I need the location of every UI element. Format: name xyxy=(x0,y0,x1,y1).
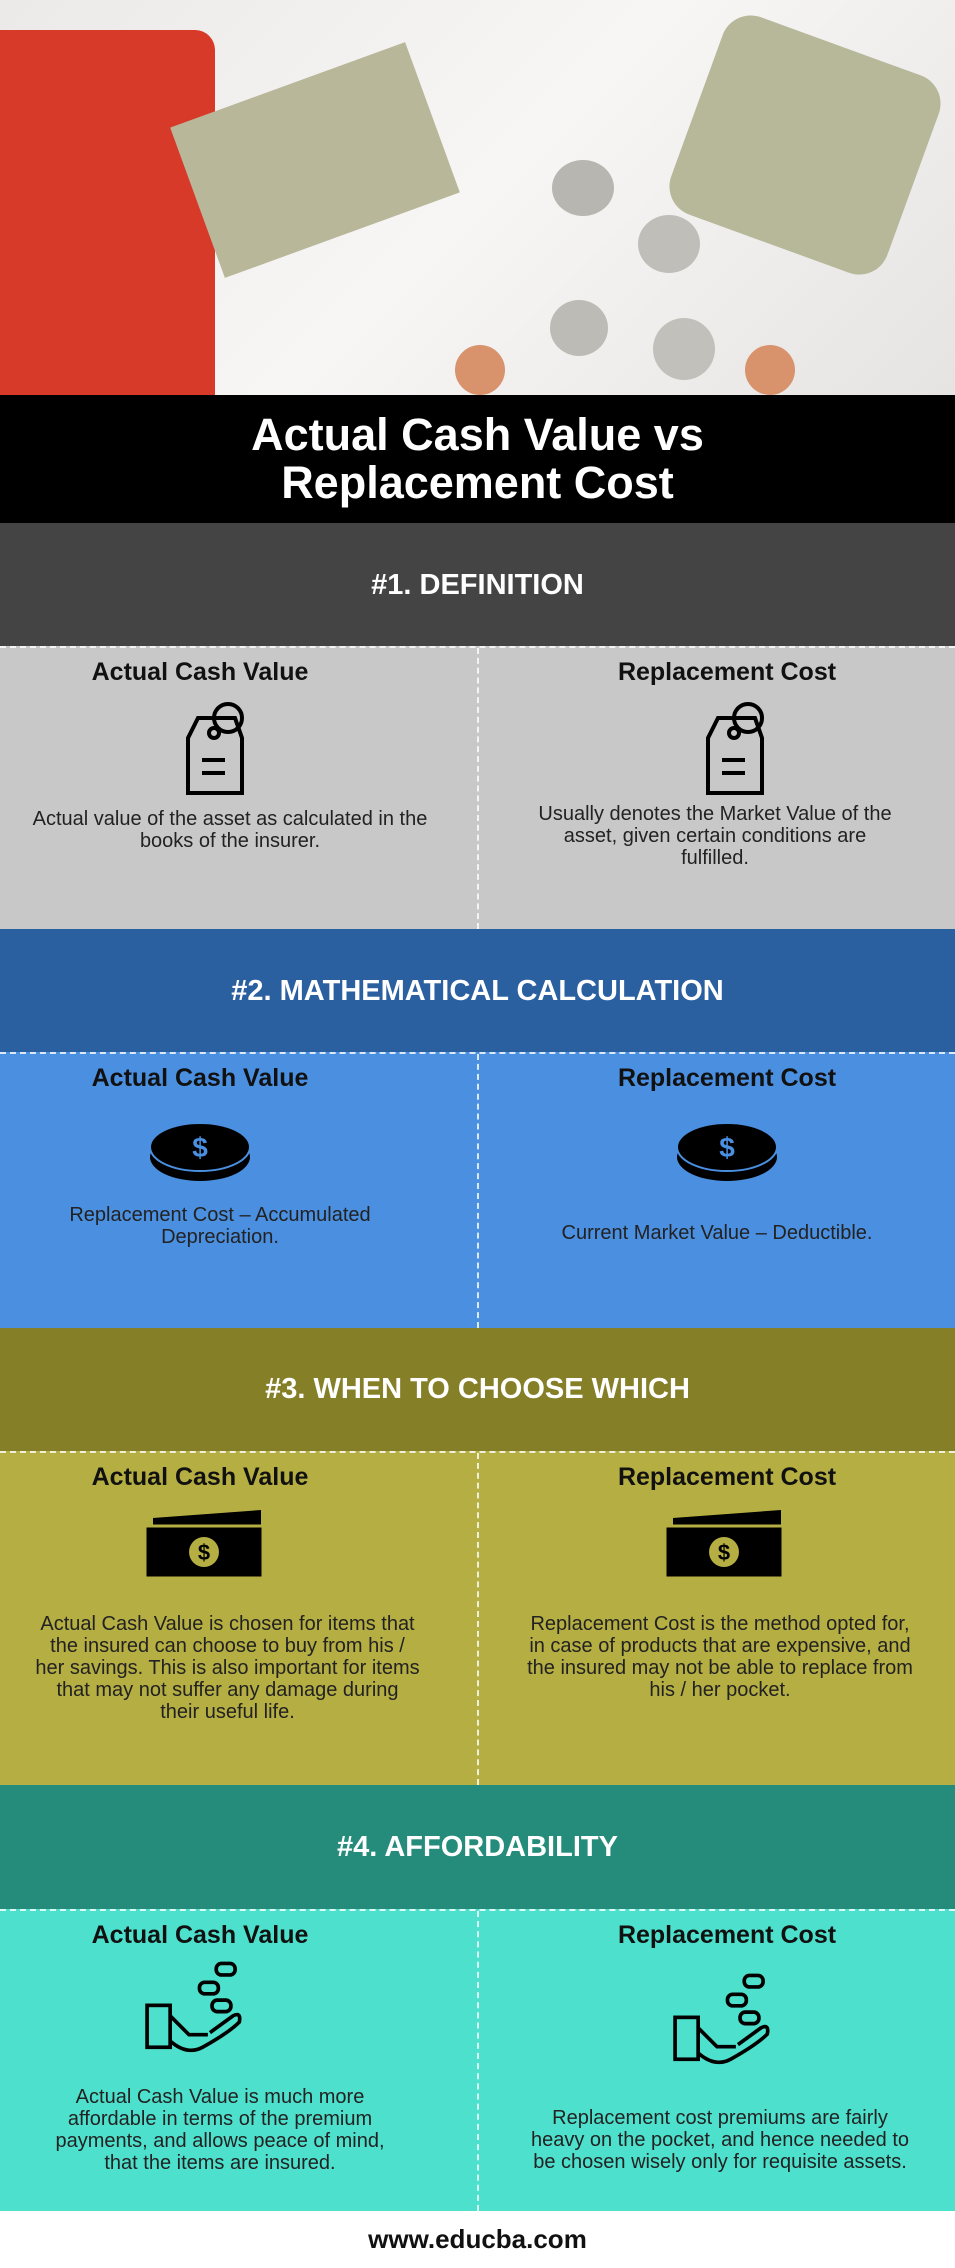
title: Actual Cash Value vs xyxy=(251,409,704,460)
icon: hand coins left xyxy=(145,1962,242,2052)
heading right: Replacement Cost xyxy=(618,658,836,686)
text right: Replacement cost premiums are fairly heavy on the pocket, and hence needed to be chosen wisely only for requisite assets. xyxy=(531,2107,909,2173)
heading right: Replacement Cost xyxy=(618,1921,836,1949)
footer: www.educba.com xyxy=(368,2224,587,2254)
text left: Actual Cash Value is chosen for items that the insured can choose to buy from his / her savings. This is also important for items that may not suffer any damage during their useful life. xyxy=(35,1613,420,1723)
icon: banknote left xyxy=(146,1510,262,1576)
icon: banknote right xyxy=(666,1510,782,1576)
heading left: Actual Cash Value xyxy=(92,1921,308,1949)
text left: Replacement Cost – Accumulated Depreciation. xyxy=(69,1204,371,1248)
text left: Actual Cash Value is much more affordable in terms of the premium payments, and allows peace of mind, that the items are insured. xyxy=(55,2086,385,2174)
title: Replacement Cost xyxy=(281,457,674,508)
panel: affordability xyxy=(0,1909,955,2211)
coins xyxy=(552,160,614,216)
section 2 header xyxy=(0,929,955,1053)
icon: coin left xyxy=(150,1124,250,1181)
icon: banknote left: $ xyxy=(198,1540,210,1565)
text right: Replacement Cost is the method opted for, in case of products that are expensive, and the insured may not be able to replace from his / her pocket. xyxy=(527,1613,913,1701)
icon: coin right: $ xyxy=(719,1132,735,1163)
icon: hand coins right xyxy=(673,1974,770,2064)
heading left: Actual Cash Value xyxy=(92,1463,308,1491)
red wallet xyxy=(0,30,215,395)
header photo xyxy=(0,0,955,395)
panel: definition xyxy=(0,646,955,929)
section 4 header: #4. AFFORDABILITY xyxy=(337,1831,618,1863)
section 1 header xyxy=(0,523,955,647)
icon: tag right xyxy=(706,702,764,795)
icon: banknote right: $ xyxy=(718,1540,730,1565)
section 4 header xyxy=(0,1785,955,1910)
panel: calculation xyxy=(0,1052,955,1328)
heading right: Replacement Cost xyxy=(618,1463,836,1491)
text right: Current Market Value – Deductible. xyxy=(562,1222,872,1244)
panel: when to choose xyxy=(0,1451,955,1785)
heading left: Actual Cash Value xyxy=(92,1064,308,1092)
text right: Usually denotes the Market Value of the asset, given certain conditions are fulfilled. xyxy=(538,803,892,869)
rolled bill xyxy=(661,7,949,283)
heading left: Actual Cash Value xyxy=(92,658,308,686)
banknote xyxy=(170,42,460,278)
section 3 header: #3. WHEN TO CHOOSE WHICH xyxy=(265,1373,690,1405)
section 3 header xyxy=(0,1328,955,1451)
icon: tag left xyxy=(186,702,244,795)
section 2 header: #2. MATHEMATICAL CALCULATION xyxy=(231,975,724,1007)
heading right: Replacement Cost xyxy=(618,1064,836,1092)
icon: coin left: $ xyxy=(192,1132,208,1163)
title xyxy=(0,395,955,523)
section 1 header: #1. DEFINITION xyxy=(371,569,584,601)
icon: coin right xyxy=(677,1124,777,1181)
text left: Actual value of the asset as calculated in the books of the insurer. xyxy=(33,808,427,852)
